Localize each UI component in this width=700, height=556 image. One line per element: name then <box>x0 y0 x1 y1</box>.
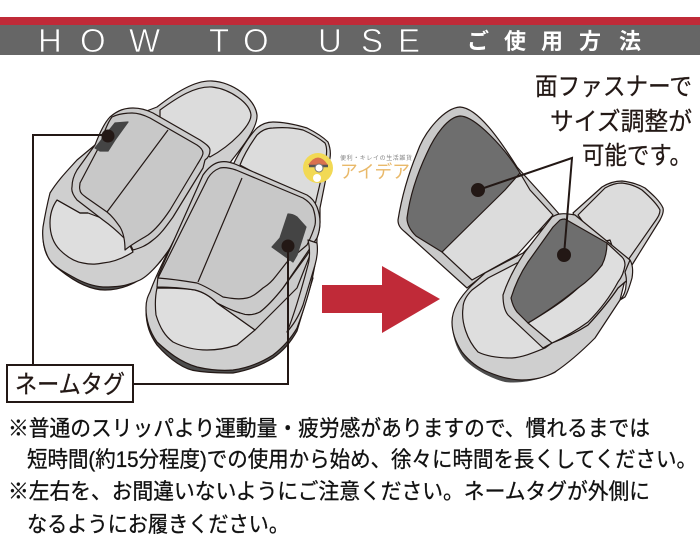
heading: HOW TO USE: HOWTOUSE <box>38 22 420 59</box>
callout: name tag: ネームタグ <box>15 371 125 399</box>
watermark logo: アイデア <box>340 162 410 182</box>
callout: fastener <box>535 73 692 170</box>
callout lines: fastener <box>472 158 572 262</box>
right slipper, closed <box>146 122 330 373</box>
watermark logo: .com <box>408 168 432 182</box>
callout: fastener: サイズ調整が <box>550 108 692 136</box>
watermark logo: 便利・キレイの生活雑貨 <box>340 154 413 162</box>
right slipper, open <box>452 181 663 383</box>
notes: ※左右を、お間違いないようにご注意ください。ネームタグが外側に <box>8 479 650 504</box>
callout: name tag <box>7 130 294 402</box>
notes: なるようにお履きください。 <box>27 512 289 537</box>
left slipper, closed <box>43 81 257 290</box>
notes <box>8 416 697 537</box>
heading: Japanese: ご使用方法 <box>467 29 641 54</box>
notes: ※普通のスリッパより運動量・疲労感がありますので、慣れるまでは <box>8 416 650 441</box>
header band <box>0 17 700 59</box>
name tag <box>95 122 128 151</box>
name tag <box>272 214 306 262</box>
watermark logo <box>303 153 432 183</box>
left slipper, open <box>398 107 560 288</box>
arrow <box>322 266 440 333</box>
